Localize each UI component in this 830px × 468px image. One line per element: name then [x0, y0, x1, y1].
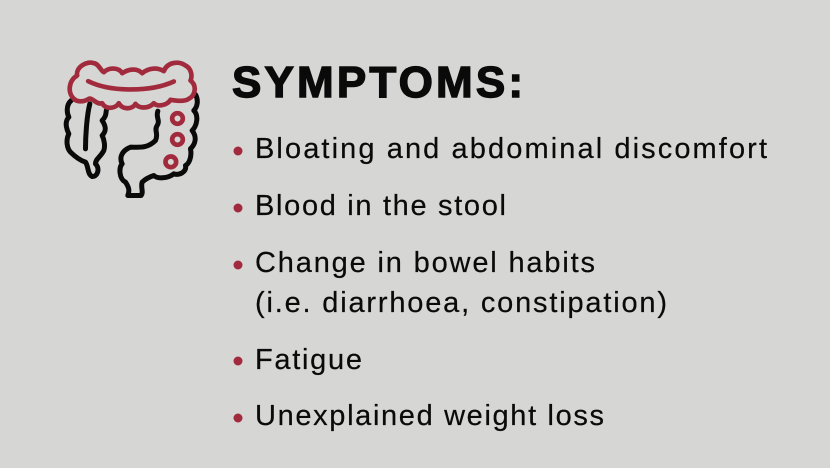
bullet item: bloating: Bloating and abdominal discomfort	[255, 133, 767, 165]
bullet item: bowel habits: (i.e. diarrhoea, constipation)	[255, 287, 667, 319]
bullet item: bowel habits: Change in bowel habits	[255, 247, 595, 279]
icon: inflamed transverse colon	[70, 63, 195, 167]
bullet item: fatigue: Fatigue	[255, 344, 362, 376]
bullet item: bowel habits	[234, 247, 667, 319]
icon: small intestine and lower colon outline	[66, 94, 197, 195]
icon: colon with polyps	[66, 63, 197, 195]
bullet item: blood in stool: Blood in the stool	[255, 190, 506, 222]
symptom list	[234, 133, 767, 432]
bullet item: weight loss: Unexplained weight loss	[255, 400, 604, 432]
title: SYMPTOMS:	[232, 58, 523, 107]
